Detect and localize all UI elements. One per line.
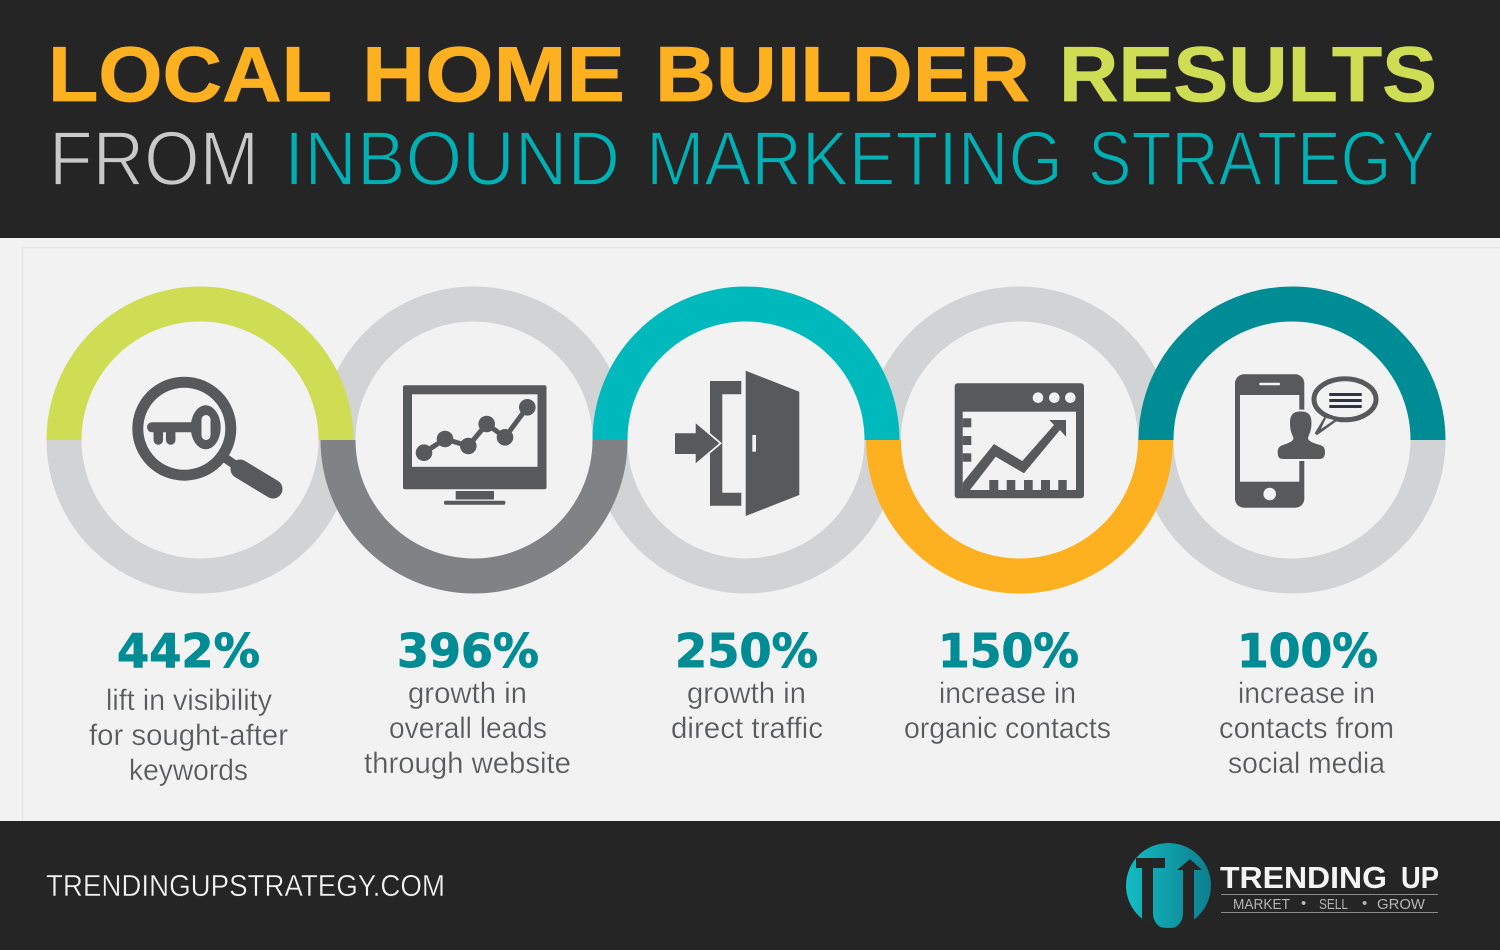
interlocking rings xyxy=(64,304,1428,576)
title line one: BUILDER xyxy=(655,30,1030,118)
logo tagline: • xyxy=(1362,895,1367,912)
stat: 442%: lift in visibility xyxy=(106,684,272,717)
stat: 250%: growth in xyxy=(687,677,806,710)
title line two xyxy=(49,116,1435,202)
stat: 150% xyxy=(904,624,1111,745)
stat: 442%: keywords xyxy=(129,754,248,787)
stat: 150%: organic contacts xyxy=(904,712,1111,745)
title line one: HOME xyxy=(362,30,625,118)
logo tagline: • xyxy=(1301,895,1306,912)
logo tagline xyxy=(1221,894,1438,913)
stat: 442%: 442% xyxy=(117,624,260,678)
logo wordmark: TRENDING xyxy=(1220,860,1387,895)
title line two: MARKETING xyxy=(646,116,1063,202)
logo: Trending Up xyxy=(1126,843,1439,932)
stat: 396%: 396% xyxy=(397,624,539,678)
stat: 100%: 100% xyxy=(1237,624,1378,678)
stat: 442% xyxy=(89,624,288,787)
footer band xyxy=(0,821,1500,950)
stat: 396% xyxy=(364,624,571,780)
icon: monitor with line chart xyxy=(403,385,546,505)
logo mark xyxy=(1126,843,1211,932)
logo wordmark: UP xyxy=(1401,860,1439,895)
title line two: STRATEGY xyxy=(1088,116,1435,202)
logo tagline: SELL xyxy=(1319,896,1348,913)
stat: 100%: social media xyxy=(1228,747,1385,780)
title line one: RESULTS xyxy=(1059,30,1437,118)
title line two: FROM xyxy=(49,116,259,202)
header banner xyxy=(0,0,1500,238)
logo tagline: MARKET xyxy=(1233,896,1290,913)
icon: door with entry arrow xyxy=(675,371,799,516)
title line one xyxy=(48,30,1437,118)
stat: 250% xyxy=(671,624,823,745)
stat: 100%: contacts from xyxy=(1219,712,1394,745)
stat: 396%: overall leads xyxy=(389,712,547,745)
website address: TRENDINGUPSTRATEGY.COM xyxy=(46,868,445,903)
icon: smartphone with person and speech bubble xyxy=(1235,374,1376,508)
stat: 150%: increase in xyxy=(939,677,1076,710)
icon: browser window with rising chart xyxy=(955,383,1084,498)
logo tagline: GROW xyxy=(1377,896,1426,913)
stat: 250%: direct traffic xyxy=(671,712,823,745)
icon: magnifier with key xyxy=(138,382,273,489)
stat: 100%: increase in xyxy=(1238,677,1375,710)
stat: 442%: for sought-after xyxy=(89,719,288,752)
stat: 100% xyxy=(1219,624,1394,780)
title line two: INBOUND xyxy=(284,116,620,202)
title line one: LOCAL xyxy=(48,30,332,118)
stat: 396%: growth in xyxy=(408,677,527,710)
stat: 396%: through website xyxy=(364,747,571,780)
stat: 150%: 150% xyxy=(938,624,1079,678)
stat: 250%: 250% xyxy=(675,624,818,678)
